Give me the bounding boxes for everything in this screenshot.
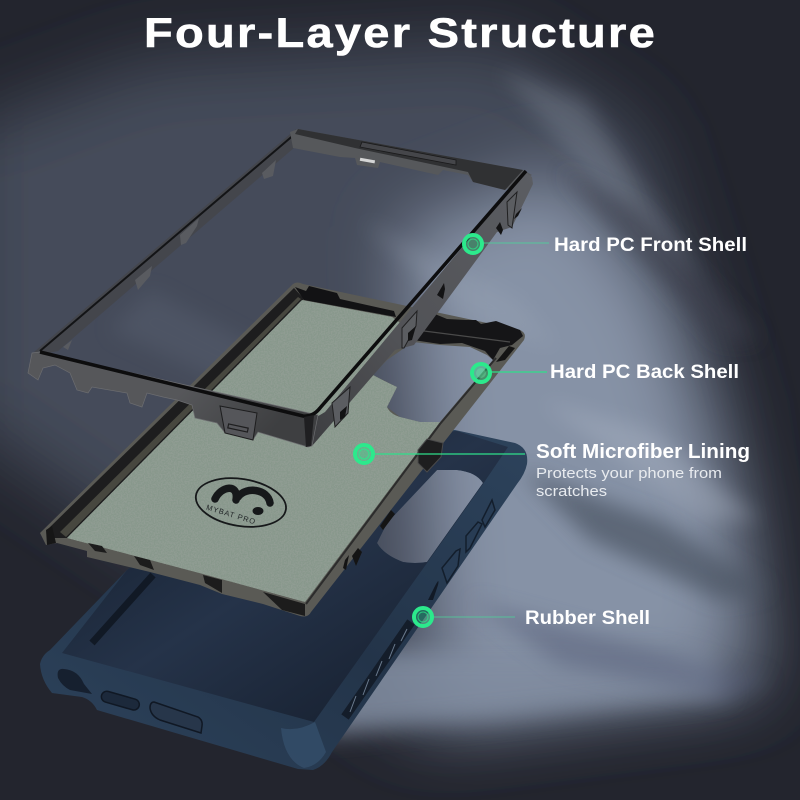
- back shell right rim detail: [306, 358, 496, 604]
- title: Four-Layer Structure: [144, 9, 657, 56]
- leader line: [491, 371, 547, 373]
- wall corner shadow: [304, 415, 314, 447]
- top bar dark upper face: [295, 129, 523, 190]
- side buttons: [442, 500, 495, 583]
- bottom rim black clips: [88, 543, 305, 616]
- speaker slot: [100, 690, 141, 711]
- left bar dark edge: [40, 133, 296, 351]
- logo mark: [215, 488, 270, 503]
- grip band: [345, 622, 411, 717]
- layer: hard PC front shell: [28, 129, 533, 447]
- charging port: [150, 702, 202, 733]
- callout: hard PC front shell: [464, 235, 747, 256]
- leader line: [483, 242, 549, 244]
- description second line: scratches: [536, 484, 607, 500]
- front shell top bar: [290, 129, 532, 190]
- logo dot: [252, 507, 264, 515]
- layer: hard PC back shell: [40, 282, 525, 616]
- right wall clips: [332, 192, 517, 427]
- microfiber lining: [67, 300, 440, 602]
- logo wordmark: MYBAT PRO: [205, 503, 257, 526]
- marker: [355, 445, 373, 463]
- marker: [472, 364, 490, 382]
- layer: rubber shell: [40, 430, 527, 770]
- side slot: [428, 581, 438, 600]
- callout: soft microfiber lining: [355, 441, 750, 500]
- leader line: [374, 453, 525, 455]
- front shell window edge: [40, 171, 526, 416]
- top bar raised strip: [360, 142, 456, 165]
- floor groove: [92, 575, 153, 643]
- lining logo: [192, 472, 290, 533]
- right wall slots: [340, 208, 522, 420]
- back shell left ledge: [60, 297, 301, 537]
- back shell top band: [295, 286, 396, 317]
- marker: [464, 235, 482, 253]
- front shell centre tab: [220, 406, 257, 440]
- label: Rubber Shell: [525, 608, 650, 629]
- left corner: [46, 526, 56, 545]
- left bar tabs: [63, 160, 276, 350]
- label: Hard PC Front Shell: [554, 235, 747, 256]
- label: Hard PC Back Shell: [550, 362, 739, 383]
- rubber corner highlight: [281, 722, 326, 768]
- callout: hard PC back shell: [472, 362, 739, 383]
- top clip slot: [360, 158, 375, 163]
- lining texture: [67, 300, 440, 602]
- front shell left bar: [34, 129, 299, 354]
- front shell right wall: [305, 172, 533, 447]
- back shell left channel: [47, 288, 304, 538]
- lower right clip: [418, 439, 443, 472]
- label: Soft Microfiber Lining: [536, 441, 750, 463]
- rubber shell inner floor: [62, 431, 508, 722]
- description: Protects your phone from: [536, 466, 722, 482]
- leader line: [433, 616, 515, 618]
- grip highlights: [350, 629, 407, 712]
- camera band ledge: [424, 331, 510, 342]
- front shell bottom wall: [28, 352, 318, 447]
- back shell frame: [40, 282, 525, 616]
- marker: [414, 608, 432, 626]
- pen hole: [58, 669, 92, 694]
- logo ring: [192, 472, 290, 533]
- callout: rubber shell: [414, 608, 650, 629]
- right rim clips: [343, 346, 515, 570]
- camera cutout top band: [413, 312, 523, 360]
- tab slot: [228, 424, 248, 432]
- rubber shell body: [40, 430, 527, 770]
